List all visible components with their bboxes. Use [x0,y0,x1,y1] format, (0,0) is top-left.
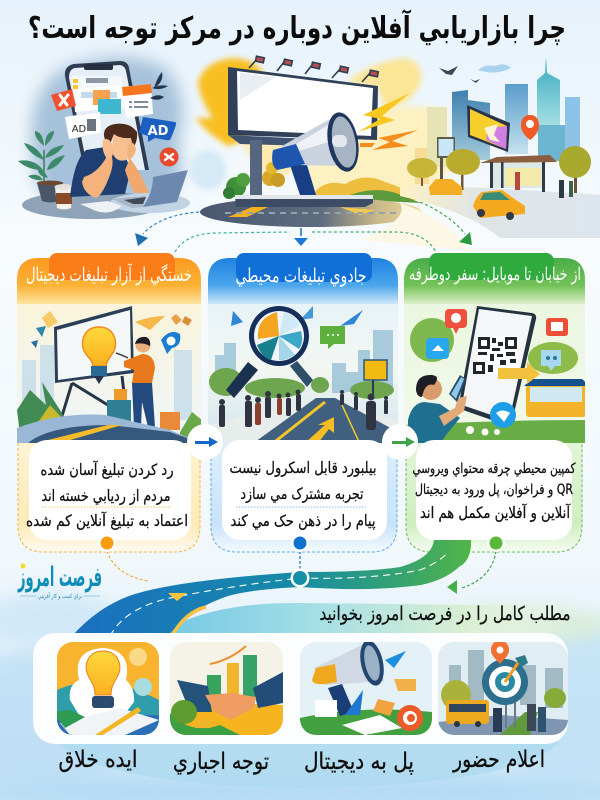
text lines: QR و فراخوان، پل ورود به ديجيتال [415,482,573,498]
icon: AD card [65,112,102,139]
text lines: رد کردن تبليغ آسان شده [40,460,174,480]
laptop and mouse pad [80,170,188,213]
panel 2 dashed text frame [211,443,397,552]
bottom labels: ايده خلاق [58,747,138,773]
panel 2 illustration [208,258,398,444]
panel 3 dashed text frame [406,443,582,552]
ground plaza [200,197,422,227]
logo: براي کسب و کار آفريني [38,591,82,600]
icon: location pin [521,115,539,140]
panel 1 heading: خستگي از آزار تبليغات ديجيتال [26,262,192,286]
tile: creative idea [52,642,159,738]
panel 1 heading tab [49,253,175,280]
phone [459,306,536,425]
bottom labels [58,747,545,775]
phone with ads [65,61,153,170]
bottom strip [33,633,568,788]
bottom labels: توجه اجباري [173,749,269,775]
icon: blue AD bubble: AD [148,124,169,139]
bus stop [480,146,591,198]
megaphone [272,110,363,195]
text lines: تجربه مشترک مي سازد [240,485,364,504]
hero illustration: tired user with ads on phone [18,57,190,219]
bottom labels: پل به ديجيتال [304,749,414,775]
text lines [26,460,188,531]
man with tablet [408,402,460,444]
taxis [429,179,525,220]
leaves accent [150,72,168,100]
trees [407,149,480,190]
hero illustration: billboard and megaphone [190,56,450,227]
icon: red close circle [160,148,178,166]
person [70,124,149,198]
text lines: آنلاين و آفلاين مکمل هم اند [420,503,571,523]
text lines: اعتماد به تبليغ آنلاين کم شده [26,511,188,531]
bushes [223,162,421,203]
text lines [230,459,376,531]
panel 3 illustration [404,258,590,444]
panel 3 heading tab [429,253,554,280]
arrowheads [135,232,472,246]
platform [235,195,373,207]
text lines [412,461,576,523]
arrows from hero to panels [135,202,472,252]
text card 2 [222,440,387,540]
connector arrow 1 [187,424,223,460]
icon: AD card: AD [72,124,87,135]
text: فرصت امروز [17,562,102,593]
spotlights [249,56,378,82]
card dots and dashed links [98,534,505,594]
lightning bolts [358,93,418,150]
text lines: بيلبورد قابل اسکرول نيست [230,459,376,478]
birds [439,66,480,83]
text card 3 [412,440,576,540]
bottom labels: اعلام حضور [452,747,545,773]
plant [18,131,65,202]
road connecting panels [72,540,570,640]
road [360,186,600,250]
icon: red close badge [51,89,76,111]
connector arrow 2 [382,424,418,460]
tall buildings [415,57,580,184]
panel 2 heading tab [236,253,372,282]
icon: blue AD bubble [139,117,176,142]
text lines: پيام را در ذهن حک مي کند [230,512,376,531]
panel 2: ambient ad magic [208,253,398,552]
text lines: مردم از رديابي خسته اند [42,487,170,506]
panel 1: digital ad fatigue [17,253,202,552]
hero illustration: city street [360,57,600,250]
panel 1 dashed text frame [18,443,200,552]
billboard [228,67,378,203]
logo [17,562,102,600]
tile: bridge to digital [300,638,432,735]
small billboard [437,137,455,180]
tile: presence [438,641,568,735]
panel 1 illustration [17,258,202,444]
text card 1 [26,440,191,540]
digital billboard [467,105,510,152]
panel 3: street to mobile [404,253,590,552]
crowd [219,390,388,430]
social icons [426,309,568,428]
coffee cup [54,184,74,210]
panel 2 heading: جادوي تبليغات محيطي [236,265,366,287]
tile: forced attention [170,642,283,735]
